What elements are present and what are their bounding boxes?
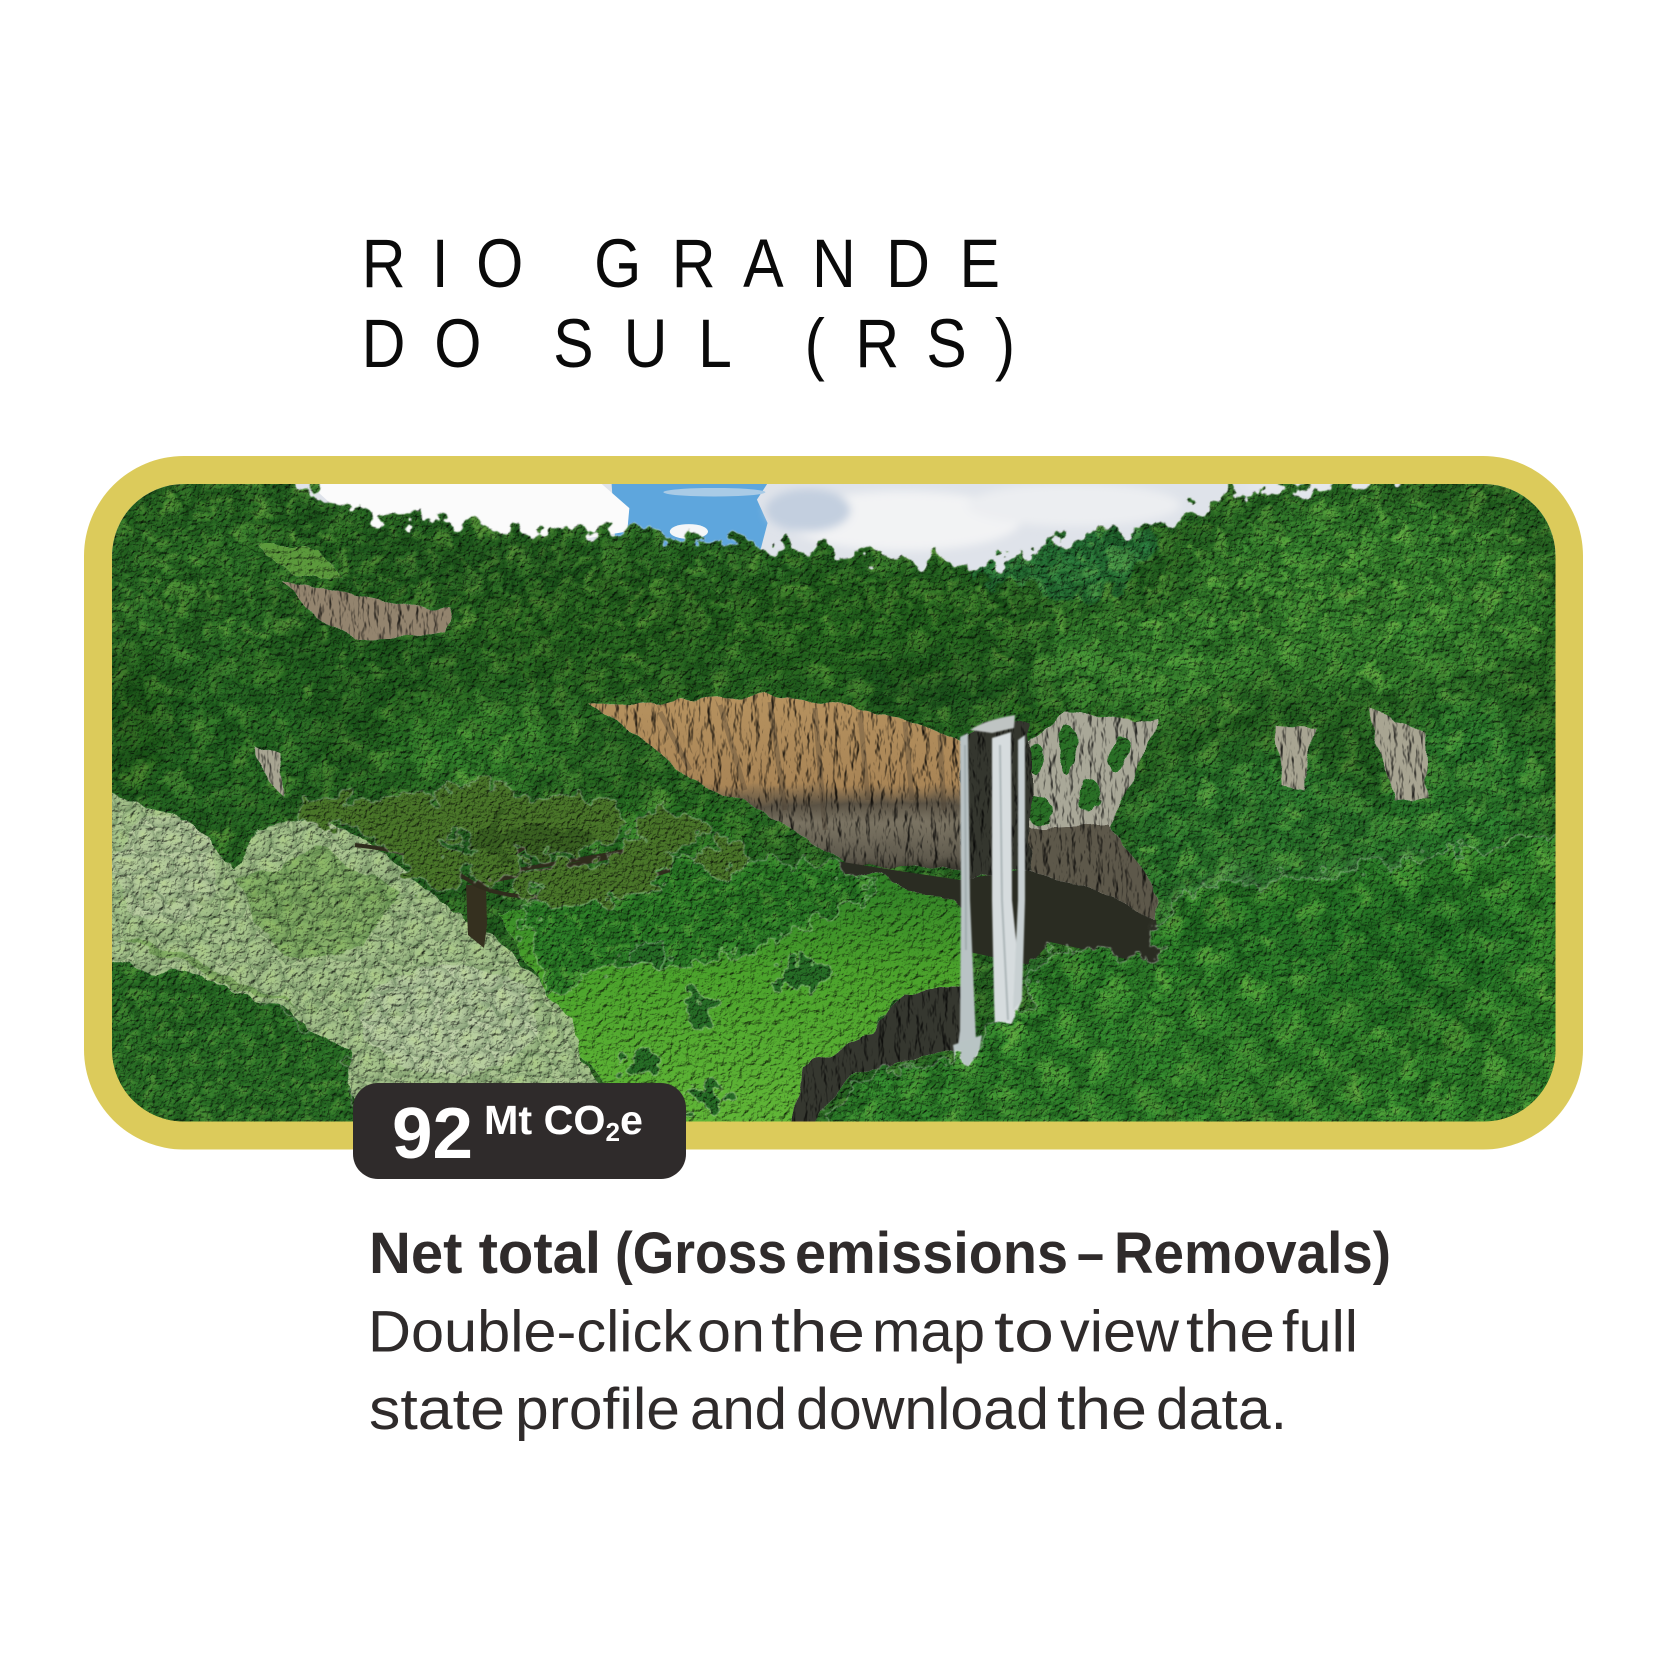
photo: forest canyon with waterfall: [112, 484, 1556, 1122]
bold heading line: (Gross: [615, 1221, 787, 1286]
sky: [112, 484, 1556, 574]
grassy ledge above small cliff: [262, 545, 346, 580]
description line 1: the: [1186, 1300, 1275, 1364]
description line 2: [369, 1377, 1287, 1442]
shrubs on slope: [618, 941, 826, 1109]
value: 92: 92: [392, 1094, 473, 1174]
description text: [368, 1221, 1391, 1442]
right grey cliff top: [1026, 714, 1158, 834]
waterfall: [953, 715, 1025, 1082]
dark grass beside waterfall: [1028, 950, 1075, 1000]
pale foreground foliage: [112, 792, 598, 1100]
bold heading line: emissions: [795, 1221, 1068, 1286]
value badge: [353, 1083, 686, 1179]
photo frame: gold rounded border: [84, 456, 1583, 1150]
title: [362, 224, 1015, 382]
infographic canvas: [84, 238, 1583, 1441]
description line 2: the: [1057, 1377, 1147, 1442]
description line 2: profile: [515, 1377, 680, 1442]
bold heading line: Removals): [1114, 1221, 1391, 1286]
unit: Mt CO2e: Mt CO: [484, 1097, 605, 1143]
description line 1: to: [994, 1300, 1054, 1364]
description line 1: full: [1282, 1300, 1358, 1364]
description line 1: view: [1060, 1300, 1180, 1364]
branches: [354, 843, 670, 899]
description line 2: and: [690, 1377, 787, 1442]
forest hills: [112, 484, 1556, 1122]
dark lower-left shrub: [112, 962, 354, 1122]
description line 1: map: [872, 1300, 985, 1364]
title: RIO GRANDE: [362, 224, 1000, 302]
right cliff dark band: [1026, 825, 1156, 920]
foreground right forest: [822, 833, 1556, 1122]
description line 1: on: [697, 1300, 765, 1364]
bright green slope: [500, 870, 965, 1130]
description line 1: [368, 1300, 1358, 1364]
main orange cliff: [590, 695, 965, 872]
unit: Mt CO2e: e: [620, 1097, 643, 1143]
dark rocks at base of falls: [790, 985, 968, 1128]
right hillside rock faces: [255, 710, 1427, 800]
bold heading line: –: [1077, 1221, 1104, 1286]
araucaria tree: [300, 782, 744, 948]
bold heading line: Net total: [369, 1221, 601, 1286]
description line 1: the: [771, 1300, 865, 1364]
description line 2: state: [369, 1377, 505, 1442]
trees at top of slope: [520, 860, 880, 990]
description line 2: data.: [1156, 1377, 1287, 1442]
unit: Mt CO2e: 2: [605, 1117, 620, 1147]
title: DO SUL (RS): [362, 304, 1015, 382]
description line 1: Double-click: [368, 1300, 693, 1364]
dark rock behind waterfall: [960, 722, 1030, 880]
bold heading line: [369, 1221, 1391, 1286]
description line 2: download: [796, 1377, 1049, 1442]
green patches on grey cliff: [1029, 726, 1129, 824]
small upper cliff: [282, 580, 452, 639]
cliff streaks: [660, 702, 944, 830]
cave under cliff: [830, 860, 1162, 968]
trunk: [466, 885, 487, 948]
canopy clusters: [300, 782, 744, 904]
